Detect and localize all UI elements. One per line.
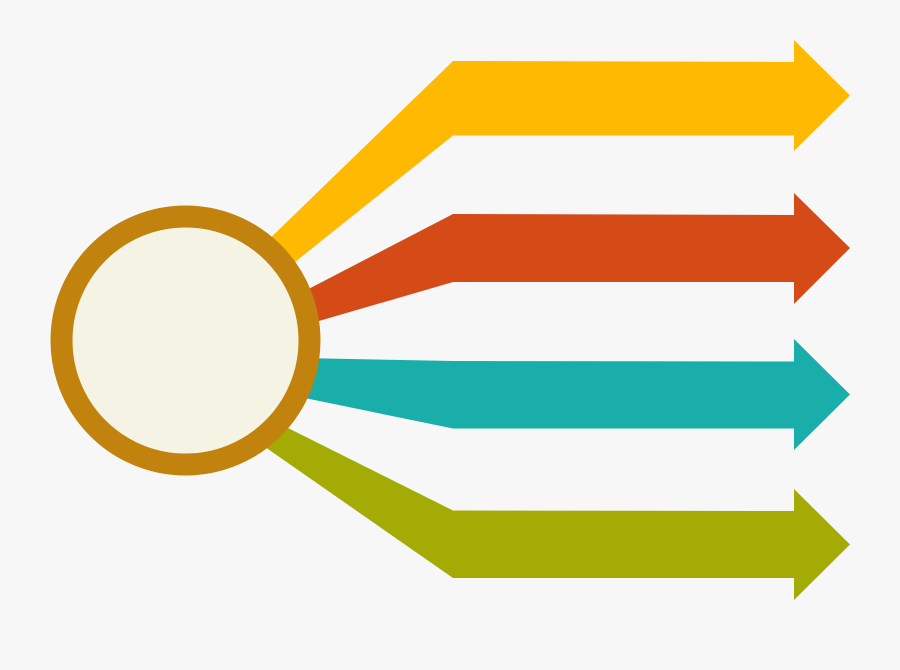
hub circle xyxy=(62,216,310,464)
arrow: red-orange xyxy=(295,193,850,326)
arrow: olive green xyxy=(255,422,850,600)
arrow: teal xyxy=(295,339,850,450)
arrow: yellow xyxy=(260,40,850,274)
